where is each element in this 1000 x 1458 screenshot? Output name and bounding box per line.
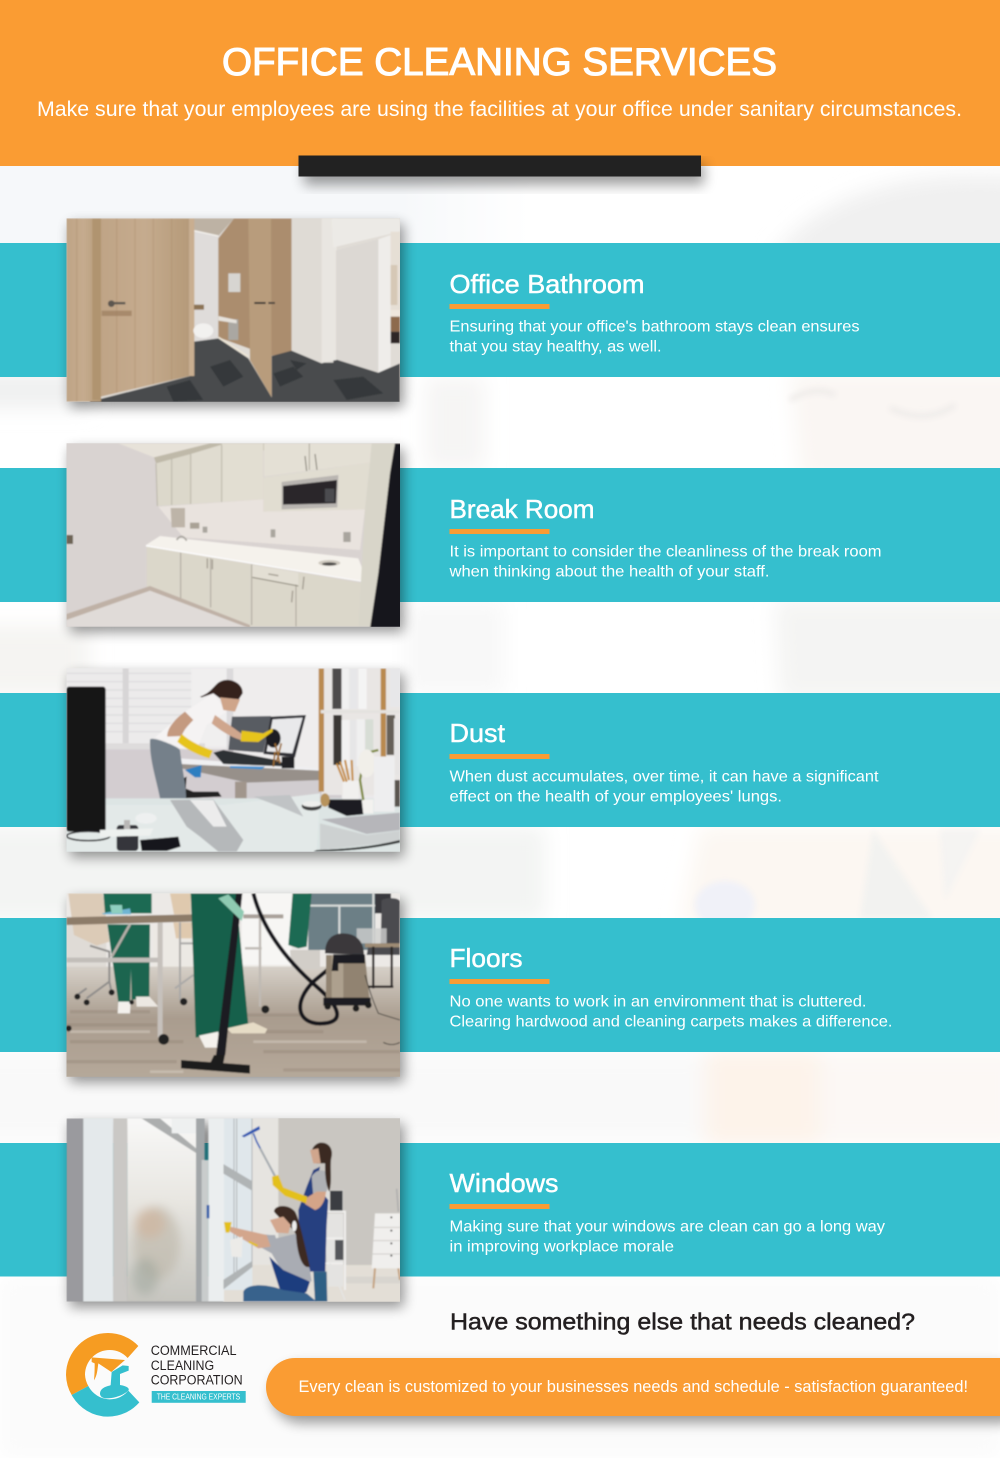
heading: floors: Floors <box>450 943 522 973</box>
heading: office bathroom: Office Bathroom <box>450 269 644 299</box>
accent rule <box>450 304 550 309</box>
accent rule <box>450 529 550 534</box>
description: When dust accumulates, over time, it can have a significant <box>450 768 879 786</box>
photo: break room <box>60 438 407 632</box>
logo tagline <box>152 1391 246 1403</box>
call-to-action heading: Have something else that needs cleaned? <box>450 1308 915 1334</box>
photo: windows <box>66 1113 407 1307</box>
logo wordmark: COMMERCIAL <box>151 1343 237 1358</box>
photo: office bathroom <box>60 213 407 407</box>
heading: break room: Break Room <box>450 494 594 524</box>
description: It is important to consider the cleanliness of the break room <box>450 544 882 560</box>
panel: dust <box>0 663 1000 857</box>
panel: office bathroom <box>0 213 1000 407</box>
title: OFFICE CLEANING SERVICES <box>222 41 777 84</box>
description <box>450 318 860 356</box>
description: when thinking about the health of your staff. <box>448 564 770 580</box>
description: No one wants to work in an environment that is cluttered. <box>450 994 866 1010</box>
description: effect on the health of your employees' lungs. <box>450 788 782 806</box>
photo: floors <box>60 888 407 1082</box>
logo wordmark: CLEANING <box>151 1358 214 1373</box>
logo: commercial cleaning corporation <box>66 1333 246 1417</box>
call-to-action pill <box>266 1358 1000 1423</box>
logo wordmark <box>151 1343 243 1388</box>
heading: dust: Dust <box>450 718 506 748</box>
accent rule <box>450 1204 550 1209</box>
description <box>448 544 882 580</box>
description: Clearing hardwood and cleaning carpets makes a difference. <box>450 1014 892 1030</box>
description: in improving workplace morale <box>450 1238 674 1256</box>
header dark bar <box>298 156 704 185</box>
heading: windows: Windows <box>450 1168 558 1198</box>
description <box>450 994 892 1030</box>
description: Ensuring that your office's bathroom stays clean ensures <box>450 318 860 336</box>
panel: floors <box>0 888 1000 1082</box>
call-to-action pill: Every clean is customized to your businesses needs and schedule - satisfaction guaranteed! <box>298 1378 968 1396</box>
description <box>450 1218 885 1256</box>
logo wordmark: CORPORATION <box>151 1372 243 1388</box>
icon: C ring with spray bottle <box>66 1333 139 1417</box>
panel: windows <box>0 1113 1000 1307</box>
accent rule <box>450 979 550 984</box>
header banner <box>0 0 1000 166</box>
subtitle: Make sure that your employees are using the facilities at your office under sanitary circumstances. <box>37 97 962 121</box>
panel: break room <box>0 438 1000 632</box>
description: Making sure that your windows are clean can go a long way <box>450 1218 885 1236</box>
accent rule <box>450 754 550 759</box>
description: that you stay healthy, as well. <box>450 338 662 356</box>
photo: dust <box>60 663 407 857</box>
logo tagline: THE CLEANING EXPERTS <box>157 1393 240 1402</box>
description <box>450 768 879 806</box>
